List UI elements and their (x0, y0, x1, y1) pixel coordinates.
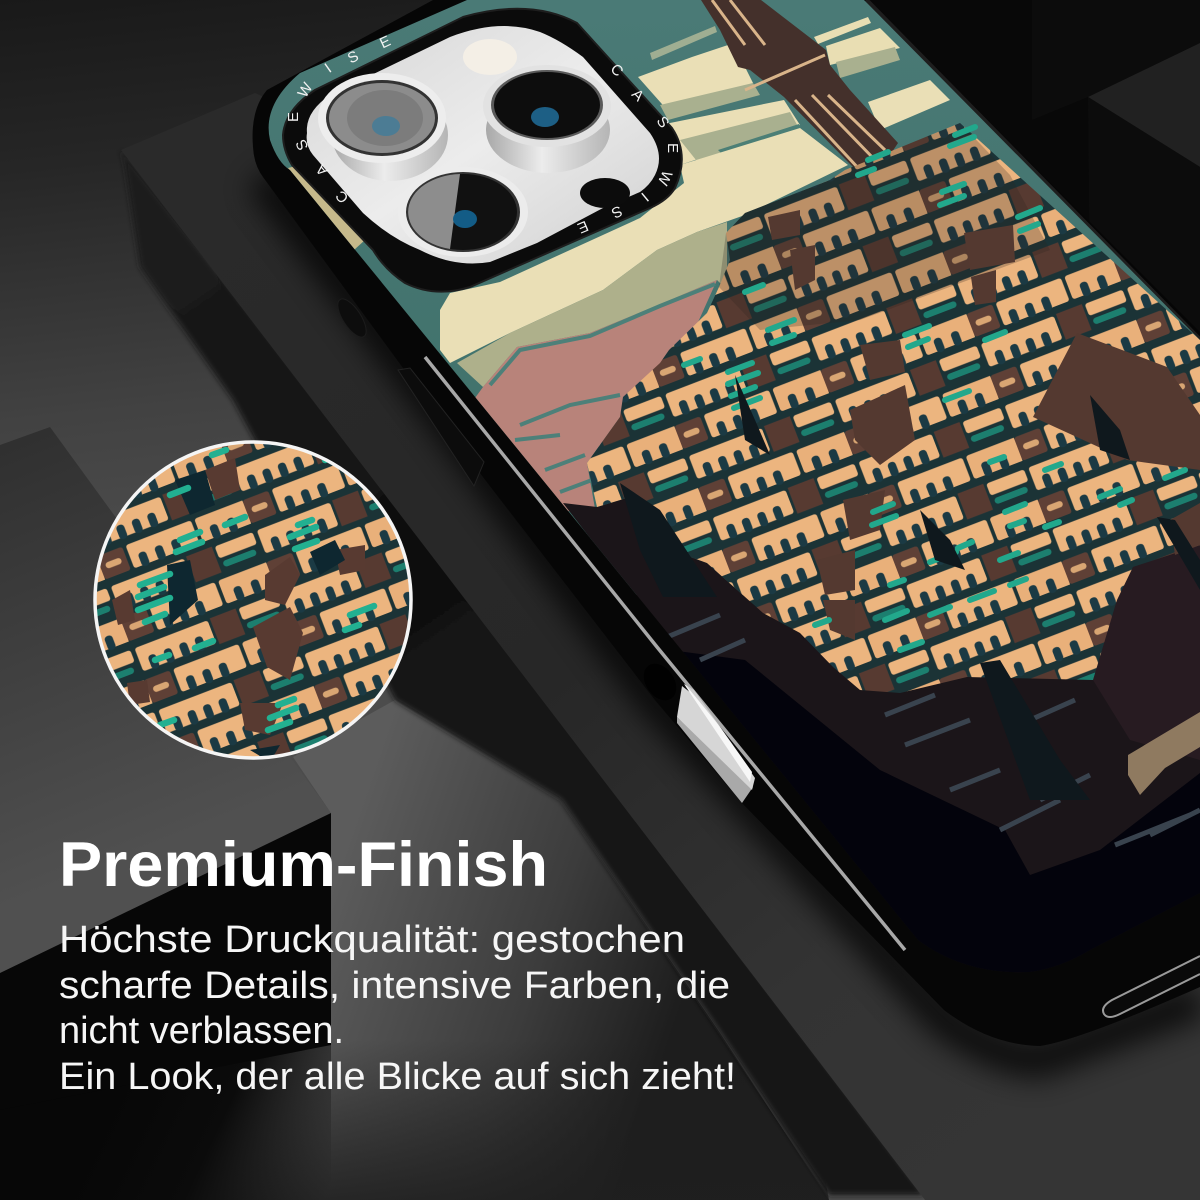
heading: Premium-Finish (59, 830, 548, 900)
brown roof patches (112, 458, 365, 735)
body copy: Höchste Druckqualität: gestochen (59, 919, 685, 961)
CASEWISE lettering: E (285, 112, 302, 122)
microphone hole (580, 178, 630, 208)
sand strip by the lens frame (288, 165, 365, 250)
darker upper hillside (719, 123, 1050, 330)
body copy: scharfe Details, intensive Farben, die (59, 965, 730, 1007)
hillside city (587, 123, 1200, 800)
black lower screen (660, 650, 1200, 990)
case body (253, 0, 1200, 1046)
lower left block top (0, 427, 331, 973)
sky (250, 0, 1200, 595)
detail zoom circle (95, 442, 411, 762)
CASEWISE lettering: W (294, 79, 317, 101)
phone case (250, 0, 1200, 1046)
lens: upper left (318, 73, 448, 181)
shadowed block face (0, 813, 331, 1110)
CASEWISE lettering: A (313, 160, 332, 179)
blue grey rooftop streaks (660, 615, 1200, 845)
CASEWISE lettering: E (575, 217, 591, 236)
lens: upper right (483, 65, 611, 173)
body copy: nicht verblassen. (59, 1010, 344, 1052)
phone screen artwork (268, 0, 1200, 875)
CASEWISE lettering (285, 33, 681, 236)
CASEWISE lettering: E (664, 143, 681, 153)
phone shadow (263, 177, 1200, 1060)
dark shadows (167, 470, 345, 762)
lens: bottom (398, 167, 528, 257)
body copy: Ein Look, der alle Blicke auf sich zieht! (59, 1056, 736, 1098)
CASEWISE lettering: C (332, 187, 352, 206)
CASEWISE lettering: S (293, 137, 312, 153)
brown walls (768, 210, 1200, 640)
CASEWISE lettering: I (322, 60, 335, 77)
CASEWISE lettering: A (628, 86, 647, 105)
pink mountains (475, 280, 717, 520)
lit floor (0, 700, 829, 1200)
CASEWISE lettering: W (653, 168, 675, 189)
charging port (1103, 956, 1200, 1017)
CASEWISE lettering: C (607, 61, 627, 80)
tower (701, 0, 898, 170)
CASEWISE lettering: I (638, 189, 652, 204)
CASEWISE lettering: E (377, 33, 393, 52)
CASEWISE lettering: S (609, 202, 625, 221)
case rim line (866, 0, 1200, 340)
shadow pool under the text (0, 1030, 331, 1200)
CASEWISE lettering: S (653, 113, 672, 131)
teal foliage (138, 450, 374, 730)
main block side (121, 150, 925, 1195)
CASEWISE lettering: S (345, 48, 362, 67)
rear blocks on the right (600, 0, 1200, 460)
lit rooftops lower right (1128, 712, 1200, 795)
side buttons (332, 295, 755, 803)
teal rooftop foliage (684, 127, 1185, 650)
body copy (59, 919, 736, 1098)
flash (463, 39, 517, 75)
case edge highlight (425, 357, 905, 950)
dark foreground (563, 498, 1200, 875)
camera island (283, 9, 682, 292)
dark cypress trees (620, 375, 1200, 800)
camera window (307, 26, 659, 263)
clouds (440, 17, 950, 387)
